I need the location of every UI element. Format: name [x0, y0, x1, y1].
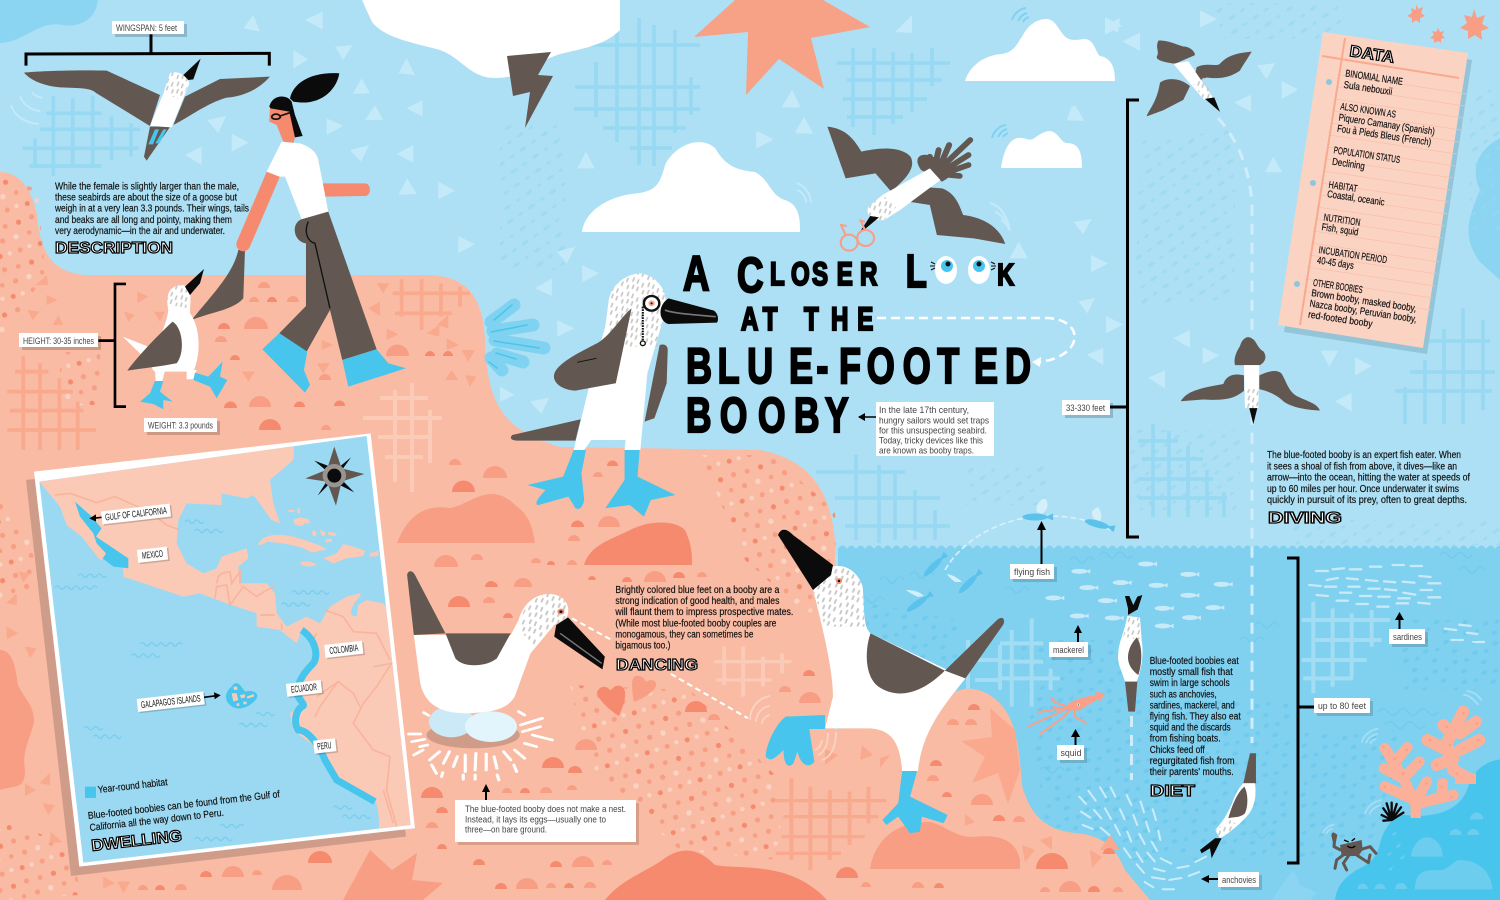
text: dancing — [615, 585, 793, 674]
sky decoration: hatch grids — [23, 18, 1495, 543]
text: dancing: DANCING — [616, 657, 698, 674]
dark land mounds — [584, 522, 827, 900]
text: diving: quickly in pursuit of its prey, often to great depths. — [1267, 495, 1467, 506]
small stars — [1407, 4, 1489, 43]
text: diet: regurgitated fish from — [1150, 756, 1235, 767]
icon: eyes — [930, 256, 996, 284]
seabed mound — [1335, 759, 1500, 900]
diving bracket — [1110, 100, 1139, 537]
nest: shadow, eggs and rays — [409, 706, 552, 780]
title line 1: OO — [935, 255, 986, 289]
star: top — [694, 0, 870, 95]
bird: underwater upward — [1118, 595, 1143, 712]
label: sardines: sardines — [1393, 632, 1422, 643]
heading: dwelling: DWELLING — [91, 828, 183, 855]
school of mackerel — [1045, 561, 1233, 628]
cloud: small right — [1001, 131, 1082, 168]
note entries: Brown booby, masked booby, — [1311, 288, 1417, 315]
label: wingspan — [112, 21, 187, 37]
title line 4: BOOBY — [686, 388, 848, 443]
title line 2: THE — [804, 301, 873, 337]
coral — [1382, 712, 1480, 818]
callout: eggs: Instead, it lays its eggs—usually one to — [465, 814, 606, 826]
map land — [40, 446, 410, 828]
callout: booby traps — [876, 402, 994, 456]
cloud: upper right — [965, 19, 1115, 81]
diving path dashed, lower — [1130, 716, 1133, 780]
icon: crab — [1331, 833, 1376, 870]
label: anchovies — [1201, 872, 1262, 890]
arrow: to booby trap note — [858, 413, 877, 421]
heading: data: DATA — [1348, 43, 1396, 67]
sound arcs on land — [750, 696, 836, 760]
label: squid: squid — [1060, 748, 1082, 759]
squid — [1028, 692, 1105, 734]
diving path dashed — [1218, 118, 1252, 743]
cloud: middle — [582, 142, 800, 232]
callout: booby traps: hungry sailors would set traps — [879, 416, 989, 426]
label: ecuador — [286, 680, 324, 698]
height bracket — [98, 284, 126, 407]
callout: eggs: The blue-footed booby does not make a nest. — [465, 804, 626, 815]
text: diet: their parents' mouths. — [1150, 767, 1234, 778]
bird: dancing booby — [766, 566, 1004, 833]
text: description: these seabirds are about the size of a goose but — [55, 192, 237, 204]
title line 1: LOSER — [770, 256, 877, 292]
text: diving: it sees a shoal of fish from above, it dives—like an — [1267, 462, 1457, 472]
note entries: HABITAT — [1328, 180, 1358, 195]
label: galapagos — [137, 691, 206, 713]
land — [0, 172, 1150, 900]
bird: nesting booby — [407, 571, 605, 713]
note entries — [1307, 68, 1435, 330]
label: galapagos: GALAPAGOS ISLANDS — [140, 693, 201, 711]
seabed shapes — [1357, 813, 1493, 889]
panel: map — [26, 430, 433, 876]
callout: booby traps: for this unsuspecting seabird. — [879, 426, 987, 436]
note punch holes — [1294, 79, 1332, 287]
note entries: ALSO KNOWN AS — [1340, 102, 1397, 121]
icon: sea urchin — [1382, 803, 1403, 821]
domes: mid tone — [138, 282, 1123, 892]
callout: eggs: three—on bare ground. — [465, 824, 547, 836]
label: height: HEIGHT: 30-35 inches — [23, 336, 94, 347]
text: description — [54, 182, 249, 257]
label: gulf of california — [101, 503, 173, 526]
label: up to 80 feet — [1314, 698, 1373, 716]
lightning bolt — [507, 52, 553, 128]
label: colombia — [324, 641, 365, 659]
text: diving — [1267, 450, 1470, 527]
bird: wingspan, flying — [24, 59, 270, 161]
callout: booby traps: Today, tricky devices like this — [879, 436, 983, 446]
note entries: 40-45 days — [1316, 255, 1354, 272]
label: peru: PERU — [317, 740, 332, 753]
note entries: INCUBATION PERIOD — [1318, 245, 1388, 266]
map labels — [87, 503, 365, 855]
starfish, faint — [1272, 870, 1317, 900]
map text line 2: California all the way down to Peru. — [89, 808, 224, 834]
label: mackerel: mackerel — [1053, 645, 1084, 656]
label: gulf of california: GULF OF CALIFORNIA — [105, 505, 168, 523]
bird: big standing booby with monocle — [511, 273, 718, 517]
label: weight — [144, 418, 220, 435]
text: diving: The blue-footed booby is an expert fish eater. When — [1267, 450, 1461, 461]
bird: flying with glasses — [827, 127, 1005, 251]
map text line 1: Blue-footed boobies can be found from the Gulf of — [87, 789, 281, 822]
note entries: OTHER BOOBIES — [1312, 278, 1364, 296]
label: flying fish: flying fish — [1014, 567, 1050, 578]
label: mexico — [137, 546, 170, 564]
text: diet: DIET — [1150, 783, 1195, 800]
label: dive height — [1062, 400, 1113, 418]
corner blobs — [0, 0, 1500, 280]
text: diving: DIVING — [1268, 510, 1342, 527]
dashed gaze line — [572, 618, 748, 718]
bird: walking booby — [123, 250, 245, 409]
gulf arrow — [96, 516, 102, 519]
eye: dancing booby — [836, 578, 842, 584]
label: colombia: COLOMBIA — [329, 643, 359, 657]
note entries: Nazca booby, Peruvian booby, — [1309, 299, 1417, 325]
beak: dancing booby — [778, 530, 833, 590]
label: sardines — [1389, 612, 1428, 647]
text: diving: arrow—into the ocean, hitting the water at speeds of — [1267, 472, 1470, 484]
land decoration: hatch grids — [7, 279, 886, 870]
label: mexico: MEXICO — [142, 549, 164, 562]
label: height — [19, 333, 101, 350]
icon: hearts — [597, 676, 656, 716]
note entries: POPULATION STATUS — [1333, 145, 1401, 166]
text: diet — [1150, 656, 1241, 800]
text: diet: flying fish. They also eat — [1150, 712, 1241, 722]
label: peru — [313, 738, 338, 755]
label: anchovies: anchovies — [1222, 875, 1256, 886]
bird: diving mid — [1181, 337, 1320, 424]
note entries: Sula nebouxii — [1343, 80, 1393, 98]
label: weight: WEIGHT: 3.3 pounds — [148, 420, 213, 432]
label: up to 80 feet: up to 80 feet — [1318, 701, 1366, 712]
title — [683, 245, 1031, 443]
sound arcs, seabed — [1323, 691, 1482, 834]
label: dive height: 33-330 feet — [1066, 403, 1105, 414]
title line 1: K — [997, 257, 1014, 292]
legend text: Year-round habitat — [97, 777, 168, 796]
habitat: year-round — [75, 502, 128, 568]
note entries: BINOMIAL NAME — [1345, 68, 1404, 88]
anchovies school — [1079, 787, 1206, 889]
label: wingspan: WINGSPAN: 5 feet — [116, 23, 177, 34]
sky decoration: dashes — [500, 3, 1500, 545]
label: ecuador: ECUADOR — [291, 682, 318, 696]
compass — [305, 447, 364, 506]
note margin — [1300, 38, 1459, 325]
note entries: Piquero Camanay (Spanish) — [1338, 113, 1435, 138]
sound arcs — [11, 8, 1029, 231]
text: dancing: strong indication of good health, and males — [615, 596, 779, 607]
label: squid — [1057, 729, 1087, 763]
panel: data note — [1278, 32, 1472, 354]
domes: dark tone — [155, 297, 1115, 892]
land blobs — [0, 494, 1020, 900]
sky decoration: triangles — [185, 10, 1372, 414]
text: diet: Blue-footed boobies eat — [1150, 656, 1239, 667]
wingspan bracket — [26, 34, 269, 66]
school of sardines — [1309, 565, 1484, 642]
land star — [961, 708, 1020, 804]
text: description: While the female is slightly larger than the male, — [55, 182, 239, 192]
title line 1: A — [683, 247, 710, 301]
water ripples — [860, 552, 1484, 838]
bird: underwater swooping — [1200, 753, 1256, 858]
galapagos islands — [226, 683, 257, 708]
title line 3: BLUE-FOOTED — [686, 339, 1031, 394]
text: diet: mostly small fish that — [1150, 667, 1233, 678]
flying fish jump arc — [945, 516, 1110, 570]
text: description: and beaks are all long and pointy, making them — [55, 215, 232, 226]
water — [838, 543, 1500, 900]
text: dancing: will flaunt them to impress prospective mates. — [615, 607, 793, 618]
underwater bracket — [1287, 558, 1314, 863]
text: diet: sardines, mackerel, and — [1150, 700, 1235, 712]
note entries: NUTRITION — [1323, 212, 1361, 229]
text: description: very aerodynamic—in the air and underwater. — [55, 226, 225, 237]
map waves — [55, 520, 371, 841]
label: flying fish — [1010, 521, 1057, 582]
title line 2: AT — [741, 301, 777, 337]
text: dancing: Brightly colored blue feet on a booby are a — [615, 585, 780, 596]
arrow: eggs note — [482, 784, 490, 800]
text: diving: up to 60 miles per hour. Once underwater it swims — [1267, 484, 1459, 495]
note entries: Fou à Pieds Bleus (French) — [1336, 124, 1432, 149]
map islands — [258, 508, 378, 566]
land decoration: triangles — [6, 275, 1120, 893]
note lines — [1303, 75, 1468, 310]
note entries: Declining — [1331, 157, 1366, 172]
text: diet: from fishing boats. — [1150, 734, 1221, 744]
callout: eggs — [455, 800, 639, 845]
note entries: Fish, squid — [1321, 222, 1359, 238]
water grids — [968, 602, 1390, 707]
bird: diving start — [1147, 41, 1252, 116]
text: description: DESCRIPTION — [55, 240, 173, 257]
text: diet: squid and the discards — [1150, 722, 1231, 734]
text: dancing: bigamous too.) — [615, 640, 670, 652]
text: dancing: (While most blue-footed booby couples are — [615, 618, 777, 630]
icon: flying fish — [905, 498, 1115, 614]
dashed arrow from title — [877, 318, 1075, 367]
title line 1: C — [737, 249, 764, 303]
label: mackerel — [1049, 625, 1091, 660]
lake inlet — [351, 593, 367, 617]
note entries: red-footed booby — [1307, 310, 1373, 330]
title line 1: L — [906, 245, 927, 297]
land decoration: pale grids — [363, 383, 791, 697]
land decoration: dotted texture — [0, 175, 838, 900]
callout: booby traps: In the late 17th century, — [879, 405, 969, 416]
woman walking — [243, 73, 406, 393]
callout: booby traps: are known as booby traps. — [879, 446, 974, 456]
text: description: weigh in at a very lean 3.3 pounds. Their wings, tails — [54, 204, 249, 214]
cloud: top centre — [362, 0, 620, 78]
map borders — [55, 493, 397, 827]
text: diet: swim in large schools — [1150, 678, 1230, 689]
plant — [489, 305, 544, 370]
text: dancing: monogamous, they can sometimes be — [615, 630, 754, 640]
text: diet: Chicks feed off — [1150, 745, 1205, 756]
text: diet: such as anchovies, — [1150, 690, 1217, 700]
note entries: Coastal, oceanic — [1326, 189, 1385, 209]
